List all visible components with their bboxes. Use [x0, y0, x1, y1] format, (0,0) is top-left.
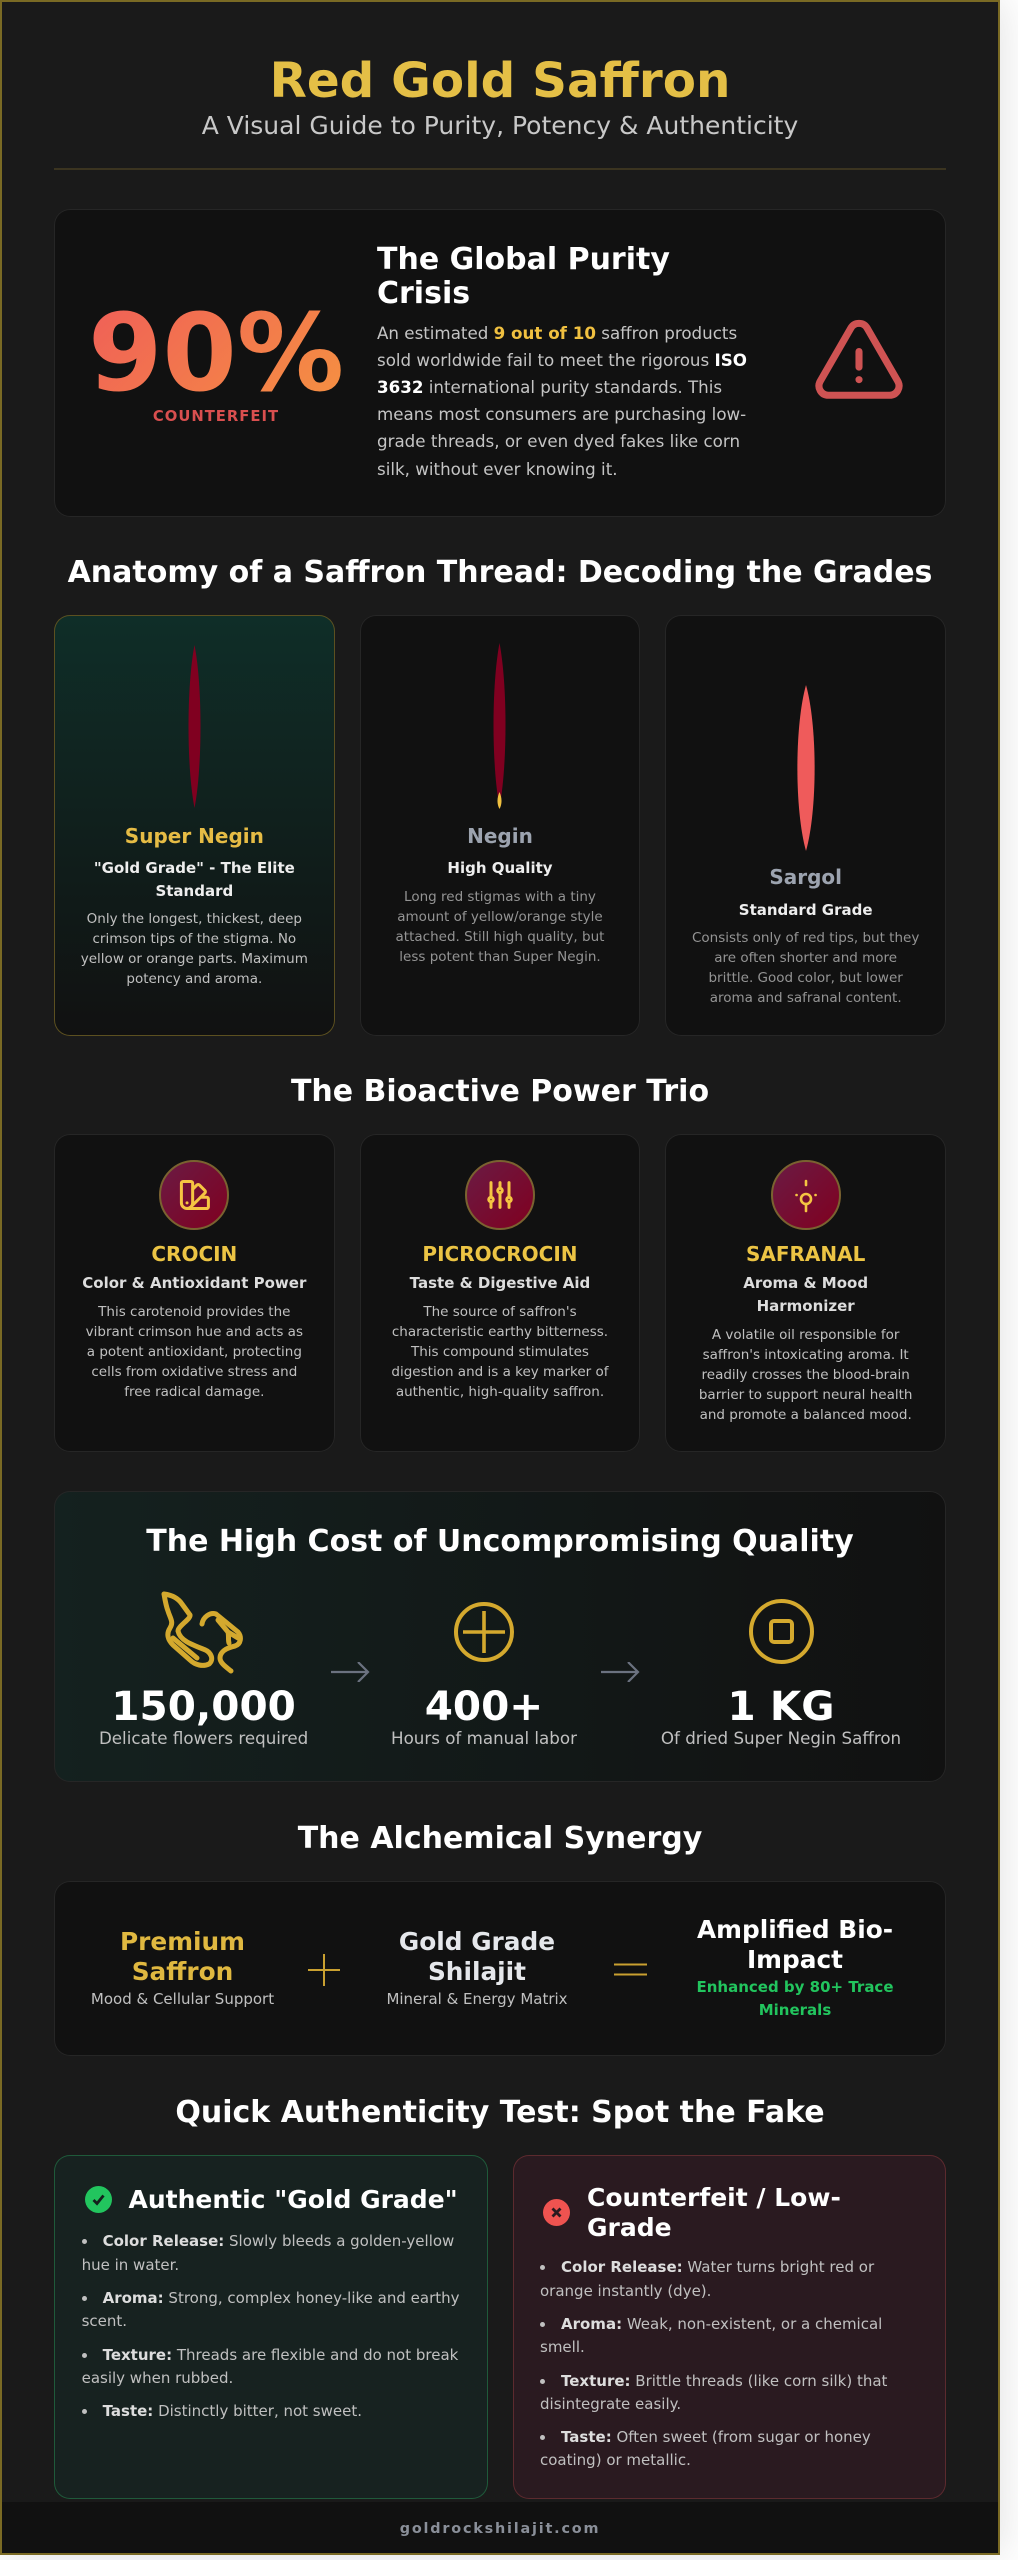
term title: Shilajit	[428, 1957, 526, 1986]
panel: counterfeit	[513, 2155, 946, 2499]
grade description	[81, 911, 308, 987]
panel: global purity crisis	[54, 209, 946, 517]
result label	[696, 1978, 894, 2019]
compound description: a potent antioxidant, protecting	[87, 1344, 302, 1360]
icon: sliders	[465, 1160, 535, 1230]
counterfeit heading: Counterfeit / Low-	[587, 2183, 841, 2212]
compound description: and promote a balanced mood.	[700, 1407, 912, 1423]
grade name: Negin	[467, 824, 533, 848]
panel: negin	[360, 615, 640, 1036]
authentic checklist: hue in water.	[82, 2256, 179, 2274]
compound subtitle: Color & Antioxidant Power	[82, 1274, 306, 1292]
grade description: aroma and safranal content.	[710, 990, 902, 1006]
crisis heading	[377, 242, 670, 311]
grade name: Super Negin	[125, 824, 264, 848]
grade description: Consists only of red tips, but they	[692, 930, 919, 946]
compound name: CROCIN	[151, 1242, 237, 1266]
grade name: Sargol	[769, 865, 842, 889]
authentic checklist: Color Release: Slowly bleeds a golden-yellow	[103, 2232, 454, 2250]
authentic heading: Authentic "Gold Grade"	[128, 2185, 458, 2214]
term title: Premium	[120, 1927, 245, 1956]
authentic checklist: Taste: Distinctly bitter, not sweet.	[103, 2402, 362, 2420]
step: flowers	[99, 1682, 308, 1748]
compound description: This carotenoid provides the	[98, 1304, 290, 1320]
crisis text: silk, without ever knowing it.	[377, 459, 618, 479]
panel: high cost of quality	[54, 1491, 946, 1782]
counterfeit checklist: orange instantly (dye).	[540, 2282, 711, 2300]
number: 150,000	[111, 1682, 296, 1730]
heading: bioactive trio: The Bioactive Power Trio	[291, 1074, 709, 1109]
icon: warning triangle	[815, 320, 903, 399]
compound description: barrier to support neural health	[699, 1387, 912, 1403]
term label: Mineral & Energy Matrix	[386, 1990, 568, 2008]
compound description: This compound stimulates	[411, 1344, 589, 1360]
grade description: less potent than Super Negin.	[399, 949, 601, 965]
authentic checklist: easily when rubbed.	[82, 2369, 233, 2387]
authentic checklist: scent.	[82, 2312, 127, 2330]
stat: 90% counterfeit: 90%	[88, 292, 344, 416]
compound description: The source of saffron's	[423, 1304, 577, 1320]
footer url: goldrockshilajit.com	[400, 2520, 600, 2536]
number label: Hours of manual labor	[391, 1728, 577, 1748]
icon: cross	[543, 2199, 570, 2226]
heading: anatomy: Anatomy of a Saffron Thread: Decoding the Grades	[68, 555, 932, 590]
result title: Impact	[747, 1945, 843, 1974]
compound description	[391, 1304, 609, 1400]
grade description: Only the longest, thickest, deep	[87, 911, 302, 927]
icon: swatch	[159, 1160, 229, 1230]
icon: aroma bulb	[771, 1160, 841, 1230]
number label: Delicate flowers required	[99, 1728, 308, 1748]
panel: safranal	[665, 1134, 946, 1452]
grade description: are often shorter and more	[714, 950, 897, 966]
footer	[2, 2502, 998, 2553]
counterfeit heading	[587, 2183, 841, 2242]
compound description	[86, 1304, 303, 1400]
panel: crocin	[54, 1134, 335, 1452]
authentic checklist	[82, 2232, 460, 2420]
number: 1 KG	[728, 1682, 834, 1730]
compound description: characteristic earthy bitterness.	[392, 1324, 608, 1340]
title: Red Gold Saffron	[270, 53, 730, 109]
counterfeit checklist: Taste: Often sweet (from sugar or honey	[561, 2428, 871, 2446]
heading: authenticity test: Quick Authenticity Test: Spot the Fake	[175, 2095, 825, 2130]
result label: Enhanced by 80+ Trace	[696, 1978, 894, 1996]
crisis heading: The Global Purity	[377, 242, 670, 277]
compound description: cells from oxidative stress and	[91, 1364, 297, 1380]
cost heading: The High Cost of Uncompromising Quality	[146, 1524, 854, 1559]
grade description	[692, 930, 919, 1006]
equals sign	[614, 1964, 647, 1976]
grade description: attached. Still high quality, but	[396, 929, 604, 945]
thread: sargol	[797, 685, 815, 851]
number: 400+	[425, 1682, 543, 1730]
counterfeit checklist: Aroma: Weak, non-existent, or a chemical	[561, 2315, 882, 2333]
plus sign	[308, 1954, 340, 1986]
grade subtitle: Standard Grade	[739, 901, 873, 919]
counterfeit checklist: smell.	[540, 2338, 585, 2356]
term label: Mood & Cellular Support	[91, 1990, 274, 2008]
term title	[399, 1927, 555, 1986]
term title: Gold Grade	[399, 1927, 555, 1956]
compound description: free radical damage.	[124, 1384, 264, 1400]
grade description	[396, 889, 604, 965]
grade description: potency and aroma.	[126, 971, 262, 987]
term: result	[696, 1915, 894, 2019]
counterfeit checklist: Texture: Brittle threads (like corn silk) that	[561, 2372, 887, 2390]
crisis text: sold worldwide fail to meet the rigorous ISO	[377, 350, 747, 370]
grade subtitle: "Gold Grade" - The Elite	[94, 859, 295, 877]
counterfeit checklist	[540, 2258, 888, 2469]
compound description: A volatile oil responsible for	[712, 1327, 899, 1343]
counterfeit checklist: coating) or metallic.	[540, 2451, 691, 2469]
result title	[697, 1915, 893, 1974]
crisis text: means most consumers are purchasing low-	[377, 404, 746, 424]
compound subtitle: Aroma & Mood	[743, 1274, 868, 1292]
panel: sargol	[665, 615, 946, 1036]
term: shilajit	[386, 1927, 568, 2008]
compound description: digestion and is a key marker of	[391, 1364, 609, 1380]
grade description: Long red stigmas with a tiny	[404, 889, 596, 905]
compound description: saffron's intoxicating aroma. It	[703, 1347, 909, 1363]
grade description: crimson tips of the stigma. No	[92, 931, 296, 947]
crisis text: grade threads, or even dyed fakes like corn	[377, 431, 740, 451]
panel: super negin	[54, 615, 335, 1036]
counterfeit checklist: Color Release: Water turns bright red or	[561, 2258, 874, 2276]
term title: Saffron	[132, 1957, 233, 1986]
term: premium saffron	[91, 1927, 274, 2008]
icon: square in circle	[749, 1599, 814, 1664]
crisis text	[377, 323, 747, 479]
compound description: vibrant crimson hue and acts as	[86, 1324, 303, 1340]
stat label: COUNTERFEIT	[153, 408, 279, 425]
grade description: brittle. Good color, but lower	[708, 970, 903, 986]
heading: alchemical synergy: The Alchemical Synergy	[298, 1821, 702, 1856]
counterfeit checklist: disintegrate easily.	[540, 2395, 681, 2413]
step: yield	[661, 1682, 901, 1748]
number label: Of dried Super Negin Saffron	[661, 1728, 901, 1748]
panel: authentic	[54, 2155, 488, 2499]
compound subtitle: Harmonizer	[757, 1297, 855, 1315]
grade description: yellow or orange parts. Maximum	[81, 951, 308, 967]
crisis text: 3632 international purity standards. This	[377, 377, 722, 397]
compound name: SAFRANAL	[746, 1242, 865, 1266]
subtitle: A Visual Guide to Purity, Potency & Authenticity	[202, 111, 798, 140]
grade description: amount of yellow/orange style	[397, 909, 603, 925]
result title: Amplified Bio-	[697, 1915, 893, 1944]
compound description: readily crosses the blood-brain	[702, 1367, 910, 1383]
step: labor	[391, 1682, 577, 1748]
icon: check	[85, 2186, 112, 2213]
crisis heading: Crisis	[377, 276, 470, 311]
icon: plus in circle	[454, 1602, 514, 1662]
compound subtitle: Taste & Digestive Aid	[410, 1274, 590, 1292]
compound name: PICROCROCIN	[422, 1242, 578, 1266]
icon: flower	[162, 1592, 243, 1674]
thread: super negin	[188, 645, 200, 808]
grade subtitle: Standard	[155, 882, 233, 900]
panel: synergy equation	[54, 1881, 946, 2056]
crisis text: An estimated 9 out of 10 saffron products	[377, 323, 737, 343]
arrow	[331, 1662, 370, 1682]
arrow	[601, 1662, 640, 1682]
panel: picrocrocin	[360, 1134, 640, 1452]
thread: negin with yellow tip	[494, 643, 506, 809]
result label: Minerals	[759, 2001, 831, 2019]
compound subtitle	[743, 1274, 868, 1315]
compound description: authentic, high-quality saffron.	[396, 1384, 604, 1400]
compound description	[699, 1327, 912, 1423]
grade subtitle	[94, 859, 295, 900]
authentic checklist: Texture: Threads are flexible and do not break	[103, 2346, 458, 2364]
term title	[120, 1927, 245, 1986]
authentic checklist: Aroma: Strong, complex honey-like and earthy	[103, 2289, 460, 2307]
grade subtitle: High Quality	[447, 859, 553, 877]
counterfeit heading: Grade	[587, 2213, 672, 2242]
